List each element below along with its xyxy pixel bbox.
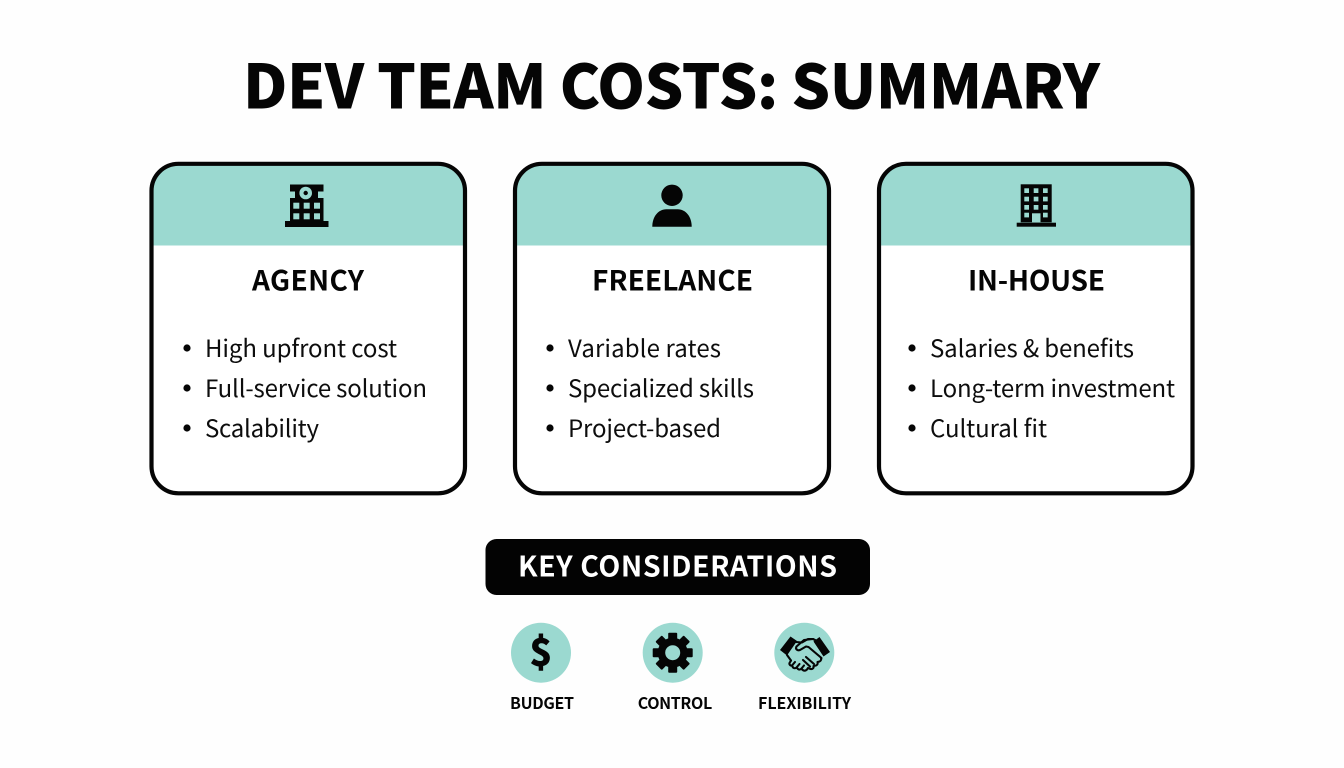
bullet list: freelance (546, 329, 754, 444)
panel header: agency (152, 164, 465, 246)
consideration: control (638, 623, 712, 714)
title: DEV TEAM COSTS: SUMMARY (243, 38, 1101, 127)
key considerations banner (486, 539, 870, 595)
heading: freelance: FREELANCE (592, 260, 753, 300)
bullet list: freelance: Project-based (568, 409, 721, 444)
bullet list: agency (183, 329, 427, 444)
label: control: CONTROL (638, 690, 712, 714)
icon: person (652, 185, 692, 227)
panel: freelance (515, 164, 829, 493)
panel: agency (152, 164, 465, 493)
bullet list: agency: Full-service solution (205, 369, 427, 404)
bullet list: in-house (908, 329, 1175, 444)
heading: in-house: IN-HOUSE (968, 260, 1105, 300)
panel: in-house (879, 164, 1192, 493)
bullet list: in-house: Cultural fit (930, 409, 1047, 444)
bullet list: in-house: Salaries & benefits (930, 329, 1134, 364)
icon: handshake (774, 623, 834, 683)
heading: agency: AGENCY (251, 260, 365, 300)
icon: dollar: $ (529, 622, 553, 677)
label: flexibility: FLEXIBILITY (758, 690, 852, 714)
panel header: freelance (515, 164, 829, 246)
icon: office building (1017, 184, 1056, 227)
icon: agency building (285, 184, 328, 227)
panel header: in-house (879, 164, 1192, 246)
icon: gear (643, 623, 703, 683)
bullet list: agency: High upfront cost (205, 329, 397, 364)
consideration: flexibility (758, 623, 852, 714)
label: budget: BUDGET (510, 690, 574, 714)
bullet list: in-house: Long-term investment (930, 369, 1175, 404)
bullet list: freelance: Specialized skills (568, 369, 754, 404)
consideration: budget (510, 622, 574, 714)
bullet list: agency: Scalability (205, 409, 319, 444)
bullet list: freelance: Variable rates (568, 329, 721, 364)
key considerations banner: KEY CONSIDERATIONS (518, 545, 837, 586)
